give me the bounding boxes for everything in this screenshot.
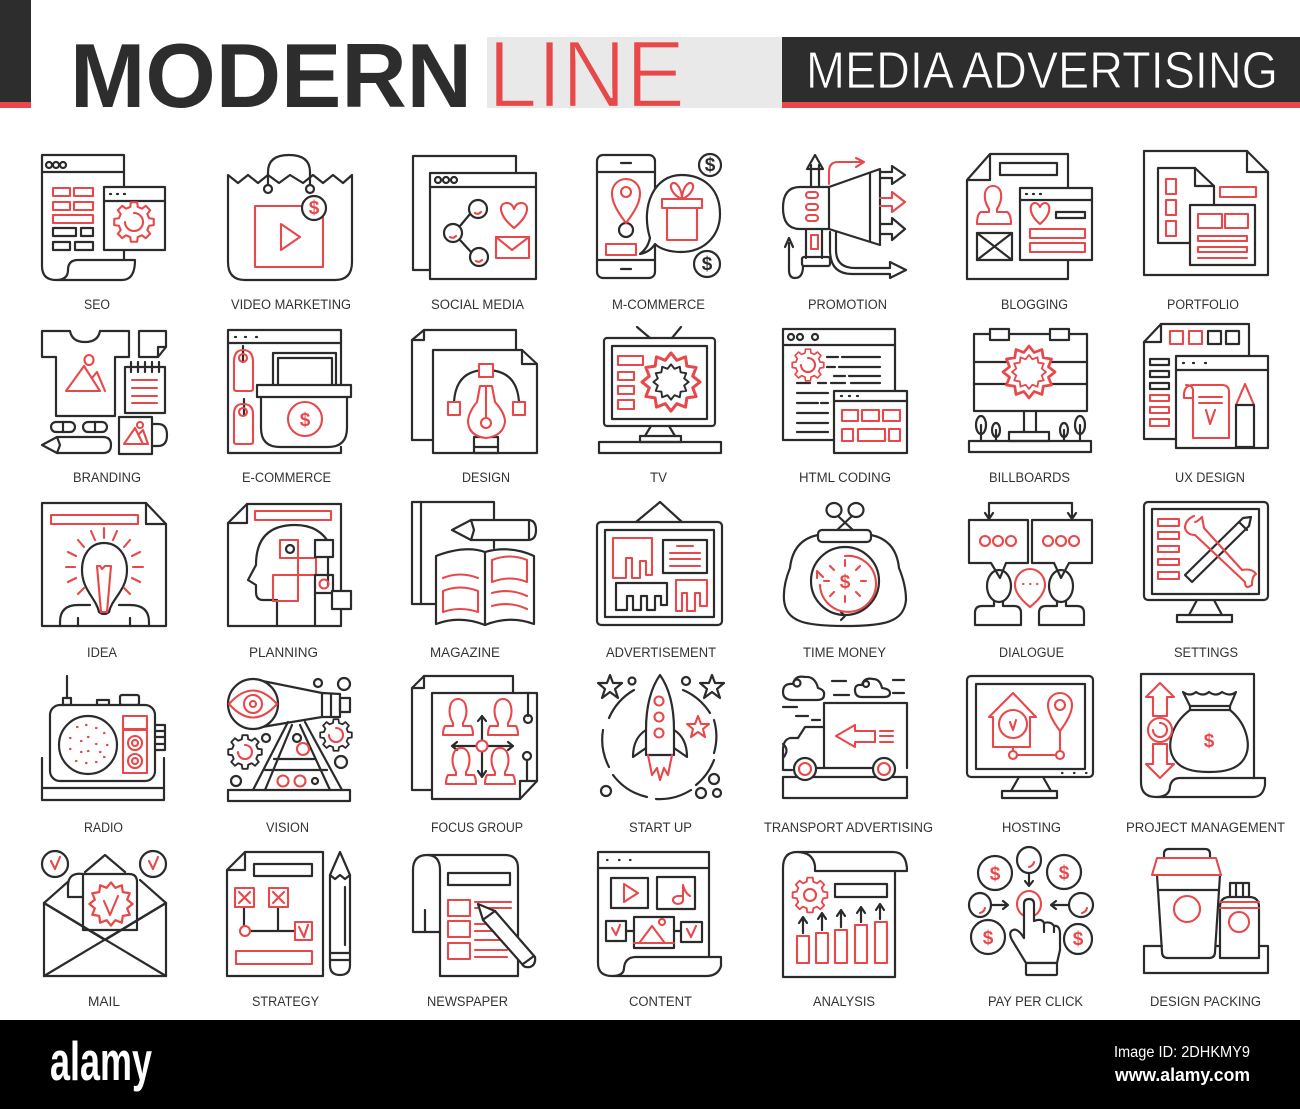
icon: phone with gift: $: [702, 254, 713, 275]
icon: content window: [598, 852, 721, 976]
icon: radio: [42, 676, 165, 800]
panel: UX DESIGN: [1144, 324, 1268, 485]
panel: BRANDING: [42, 331, 167, 485]
icon: purse with clock: $: [840, 572, 851, 593]
icon: planning head: [228, 504, 351, 626]
icon: rocket launch: [598, 675, 724, 799]
panel: HTML CODING: [783, 329, 907, 485]
icon: delivery truck: [783, 677, 907, 798]
title: MODERN: MODERN: [70, 26, 472, 127]
watermark: alamy logo: alamy: [50, 1030, 152, 1092]
panel: FOCUS GROUP: [412, 676, 537, 835]
panel: DESIGN PACKING: [1144, 849, 1268, 1009]
label: TV: TV: [650, 470, 667, 485]
label: M-COMMERCE: M-COMMERCE: [612, 297, 705, 312]
label: SEO: SEO: [84, 297, 110, 312]
panel: START UP: [598, 675, 724, 835]
icon: shop window and basket: [228, 330, 351, 453]
panel: ANALYSIS: [783, 852, 907, 1009]
label: DESIGN PACKING: DESIGN PACKING: [1150, 994, 1261, 1009]
icon: hand clicking with coins: $: [983, 928, 994, 949]
label: SETTINGS: SETTINGS: [1174, 645, 1238, 660]
title: LINE on grey band: LINE: [488, 21, 685, 128]
icon: billboard: [969, 329, 1091, 452]
panel: MAIL: [42, 851, 166, 1009]
icon: shopping bag with video: [228, 155, 352, 280]
label: ANALYSIS: ANALYSIS: [813, 994, 875, 1009]
label: MAGAZINE: MAGAZINE: [430, 645, 500, 660]
panel: TIME MONEY: [784, 503, 906, 660]
panel: CONTENT: [598, 852, 721, 1009]
label: MAIL: MAIL: [88, 994, 120, 1009]
label: TRANSPORT ADVERTISING: TRANSPORT ADVERTISING: [764, 820, 933, 835]
label: DESIGN: DESIGN: [462, 470, 510, 485]
label: RADIO: RADIO: [84, 820, 123, 835]
panel: MAGAZINE: [412, 502, 536, 660]
panel: ADVERTISEMENT: [597, 502, 722, 660]
label: PORTFOLIO: PORTFOLIO: [1167, 297, 1239, 312]
header band: [0, 0, 1300, 128]
label: PLANNING: PLANNING: [249, 645, 318, 660]
icon: phone with gift: [597, 154, 721, 278]
icon: code window: [783, 329, 907, 453]
label: PAY PER CLICK: PAY PER CLICK: [988, 994, 1083, 1009]
panel: BILLBOARDS: [969, 329, 1091, 485]
panel: PLANNING: [228, 504, 351, 660]
image ID text: Image ID: 2DHKMY9: [1114, 1044, 1250, 1061]
icon: television: [599, 327, 721, 453]
icon: money bag on scroll: $: [1204, 731, 1215, 752]
label: TIME MONEY: TIME MONEY: [803, 645, 886, 660]
icon: newspaper scroll: [413, 855, 535, 976]
icon: monitor with tools: [1144, 502, 1268, 622]
icon: magazine and pencil: [412, 502, 536, 625]
label: IDEA: IDEA: [87, 645, 117, 660]
panel: SETTINGS: [1144, 502, 1268, 660]
icon: hand clicking with coins: $: [1059, 863, 1070, 884]
left header bar: [0, 0, 31, 108]
panel: M-COMMERCE: [597, 154, 721, 312]
panel: STRATEGY: [227, 852, 350, 1009]
icon: SEO: [42, 155, 165, 280]
icon: t-shirt and merchandise: [42, 331, 167, 454]
website text: www.alamy.com: [1114, 1065, 1250, 1085]
panel: IDEA: [42, 503, 166, 660]
icon: shopping bag with video: $: [309, 198, 320, 219]
panel: DESIGN: [412, 330, 537, 485]
panel: TV: [599, 327, 721, 485]
label: VISION: VISION: [266, 820, 309, 835]
icon: monitor with house and pin: [967, 676, 1093, 798]
label: SOCIAL MEDIA: SOCIAL MEDIA: [431, 297, 524, 312]
label: NEWSPAPER: NEWSPAPER: [427, 994, 508, 1009]
icon: idea lightbulb head: [42, 503, 166, 626]
icon: opened envelope: [42, 851, 166, 976]
panel: BLOGGING: [967, 154, 1092, 312]
icon: strategy plan and pencil: [227, 852, 350, 976]
icon: megaphone with arrows: [783, 155, 906, 278]
icon: cup and bottle packaging: [1144, 849, 1268, 973]
icon: focus group: [412, 676, 537, 799]
panel: VIDEO MARKETING: [228, 155, 352, 312]
icon: shop window and basket: $: [300, 410, 311, 431]
label: PROJECT MANAGEMENT: PROJECT MANAGEMENT: [1126, 820, 1285, 835]
label: ADVERTISEMENT: ADVERTISEMENT: [606, 645, 716, 660]
panel: E-COMMERCE: [228, 330, 351, 485]
icon: phone with gift: $: [705, 155, 716, 176]
icon: blog document: [967, 154, 1092, 279]
label: DIALOGUE: DIALOGUE: [999, 645, 1064, 660]
panel: RADIO: [42, 676, 165, 835]
icon: advertising board: [597, 502, 722, 625]
icon: hand clicking with coins: [969, 847, 1093, 975]
label: HTML CODING: HTML CODING: [799, 470, 891, 485]
label: START UP: START UP: [629, 820, 692, 835]
panel: HOSTING: [967, 676, 1093, 835]
label: FOCUS GROUP: FOCUS GROUP: [431, 820, 523, 835]
label: HOSTING: HOSTING: [1002, 820, 1061, 835]
panel: SOCIAL MEDIA: [413, 156, 536, 312]
footer bar: [0, 1020, 1300, 1109]
panel: PAY PER CLICK: [969, 847, 1093, 1009]
panel: PROJECT MANAGEMENT: [1126, 674, 1285, 835]
panel: NEWSPAPER: [413, 855, 535, 1009]
icon: money bag on scroll: [1141, 674, 1265, 797]
icon: pen tool: [412, 330, 537, 453]
panel: TRANSPORT ADVERTISING: [764, 677, 933, 835]
icon: two people in dialogue: [969, 503, 1092, 625]
panel: PORTFOLIO: [1144, 151, 1268, 312]
label: VIDEO MARKETING: VIDEO MARKETING: [231, 297, 351, 312]
label: E-COMMERCE: E-COMMERCE: [242, 470, 331, 485]
icon: UX design window: [1144, 324, 1268, 448]
label: UX DESIGN: UX DESIGN: [1175, 470, 1245, 485]
label: PROMOTION: PROMOTION: [808, 297, 887, 312]
icon: social network window: [413, 156, 536, 279]
icon: hand clicking with coins: $: [1073, 929, 1084, 950]
panel: SEO: [42, 155, 165, 312]
label: BLOGGING: BLOGGING: [1001, 297, 1068, 312]
label: BILLBOARDS: BILLBOARDS: [989, 470, 1070, 485]
panel: PROMOTION: [783, 155, 906, 312]
label: CONTENT: CONTENT: [629, 994, 692, 1009]
label: STRATEGY: STRATEGY: [252, 994, 319, 1009]
icon: telescope with eye: [228, 678, 352, 801]
icon: portfolio sheets: [1144, 151, 1268, 275]
icon: analysis scroll chart: [783, 852, 907, 977]
icon: hand clicking with coins: $: [990, 864, 1001, 885]
icon: purse with clock: [784, 503, 906, 626]
panel: DIALOGUE: [969, 503, 1092, 660]
label: BRANDING: BRANDING: [73, 470, 141, 485]
panel: VISION: [228, 678, 352, 835]
